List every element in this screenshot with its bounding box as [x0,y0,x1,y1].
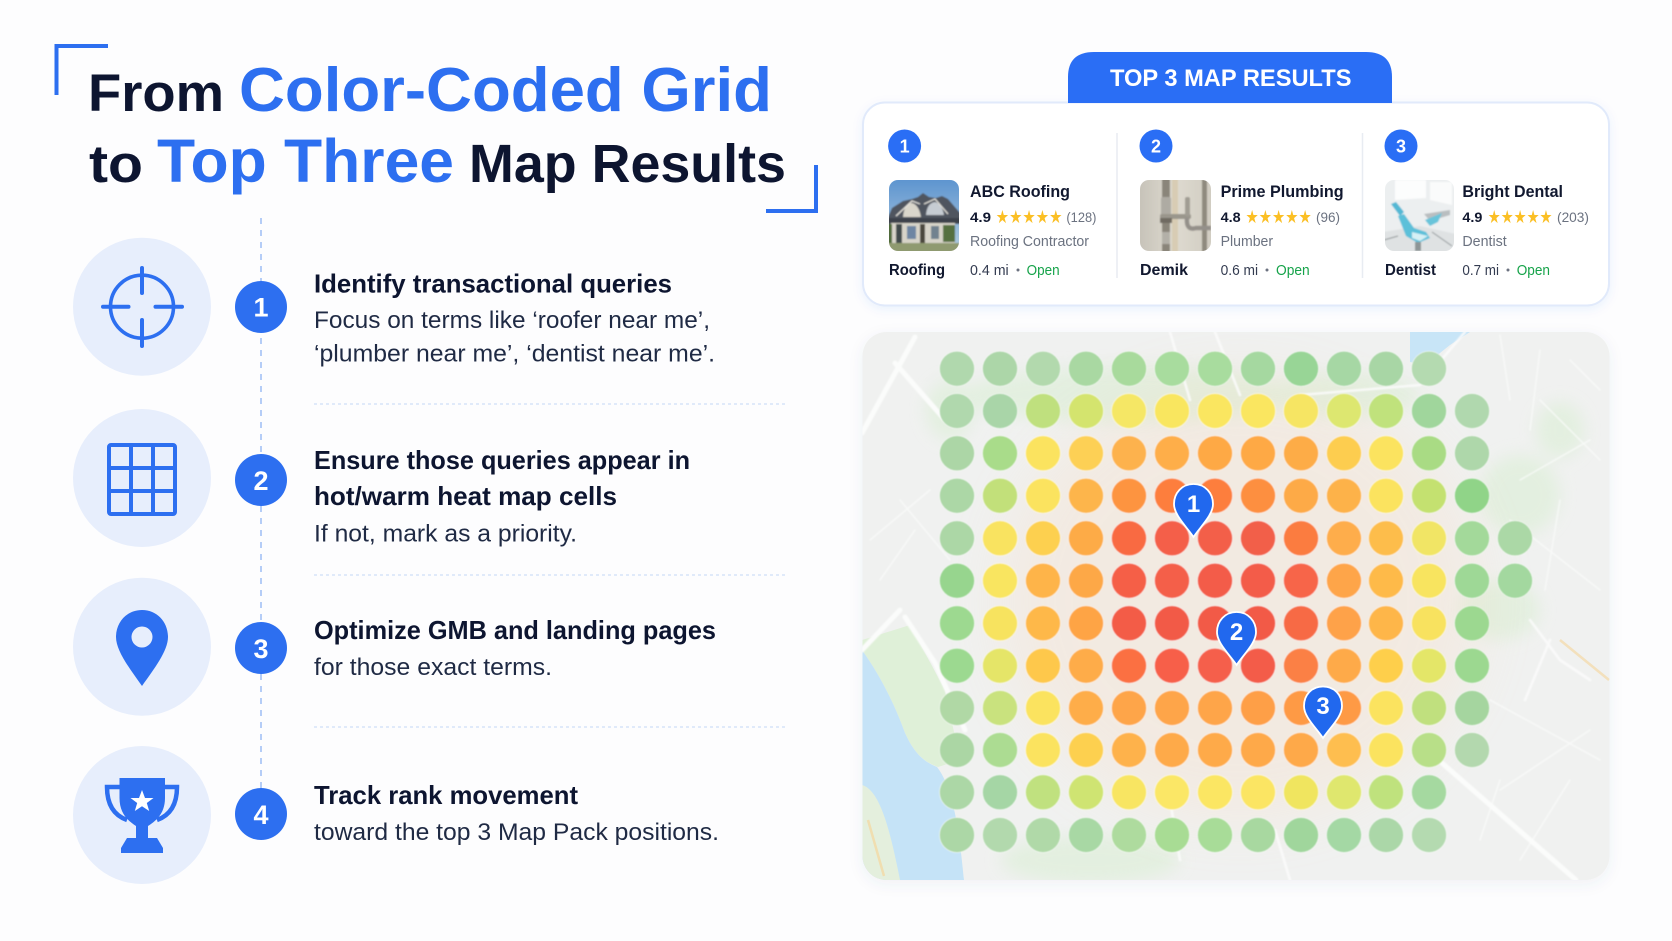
result 2: Prime Plumbing: Prime Plumbing [1221,182,1344,201]
row 12 [940,818,1446,852]
step number 2: 2 [253,466,269,496]
step 2 text: Ensure those queries appear in [314,445,690,475]
row 6 [940,563,1532,598]
map pin 1 [1174,484,1213,537]
results tab [1068,52,1392,103]
thumbnail: house [889,180,959,251]
title line 2: Map Results [469,134,786,194]
step number 3: 3 [253,634,269,664]
row 11 [940,775,1446,810]
step 1 text: Focus on terms like ‘roofer near me’, [314,307,710,334]
rating: ★★★★★ [996,207,1062,227]
result 1: ABC Roofing [886,130,1096,279]
thumbnail: pipes [1140,180,1211,251]
row 9 [940,690,1490,726]
step 4 text [314,780,719,846]
result 2: Prime Plumbing: 2 [1151,136,1161,156]
rating: 4.9 [1462,209,1483,225]
map pin 1: 1 [1187,491,1200,518]
step 4 text: toward the top 3 Map Pack positions. [314,819,719,846]
row 5 [940,521,1532,556]
result 2: Prime Plumbing: Open [1276,263,1310,279]
title bracket: top left [56,46,108,95]
business name: ABC Roofing [970,182,1070,201]
results tab: TOP 3 MAP RESULTS [1110,65,1352,92]
rating [1221,207,1340,227]
step number 1: 1 [253,292,269,322]
result 2: Prime Plumbing: Demik [1140,262,1188,279]
row 4 [940,478,1490,513]
step number 4 [235,788,287,840]
title block [56,46,816,211]
water: northern lake [1410,332,1470,365]
icon: location pin [73,578,211,716]
rating: 4.8 [1221,209,1241,225]
step number 3 [235,622,287,674]
result 3: Bright Dental: Bright Dental [1462,182,1563,201]
rating: ★★★★★ [1488,207,1552,227]
map pin 2: 2 [1230,619,1243,646]
thumbnail: dental chair [1385,180,1454,251]
step 3 text: Optimize GMB and landing pages [314,615,716,645]
timeline dashed connector [260,218,262,795]
result 3: Bright Dental: 0.7 mi [1462,263,1499,279]
title line 1: From [88,64,224,123]
result 1: ABC Roofing: Open [1027,263,1060,279]
row 3 [940,436,1490,471]
step 1 text: ‘plumber near me’, ‘dentist near me’. [314,340,715,368]
result 2: Prime Plumbing: Plumber [1221,234,1273,250]
map base layer [862,332,1609,884]
result 3: Bright Dental: Dentist [1385,262,1437,279]
row 1 [940,351,1446,386]
map pin 3 [1304,686,1342,738]
map pin 3: 3 [1316,693,1330,720]
step 3 text: for those exact terms. [314,654,552,681]
step 1 text [314,268,715,368]
rating: ★★★★★ [1246,207,1312,227]
step number 1 [235,281,287,333]
rating: 4.9 [970,209,991,225]
step 2 text: hot/warm heat map cells [314,481,617,511]
icon: trophy [73,746,211,884]
icon: grid [73,409,211,547]
rating: (96) [1316,209,1340,225]
step 2 text [314,445,690,548]
row 7 [940,606,1490,641]
panel: top 3 map results card [863,52,1609,306]
result 3: Bright Dental [1383,130,1589,279]
result 1: ABC Roofing: 1 [900,136,910,156]
shore vegetation [862,625,960,767]
water: river bay [862,650,964,880]
icon: crosshair [73,238,211,376]
result 2: Prime Plumbing: 0.6 mi [1221,263,1258,279]
title line 2: Top Three [157,127,454,195]
step 2 text: If not, mark as a priority. [314,520,577,548]
step 4 [73,746,719,884]
title line 1: Color-Coded Grid [239,56,772,125]
step 1 [73,238,715,376]
step 4 text: Track rank movement [314,780,578,810]
row 2 [940,394,1490,428]
result 3: Bright Dental: Dentist [1462,234,1507,250]
title line 2 [89,127,786,195]
rating: (203) [1557,209,1589,225]
result 1: ABC Roofing: Roofing [889,262,945,279]
step number 2 [235,454,287,506]
step 3 text [314,615,716,681]
result 1: ABC Roofing: Roofing Contractor [970,234,1089,250]
result 3: Bright Dental: 3 [1396,136,1406,156]
step 3 [73,578,716,716]
step 2 [73,409,690,548]
result 3: Bright Dental: Open [1517,263,1550,279]
rating [970,207,1096,227]
rating: (128) [1066,209,1096,225]
title bracket: bottom right [766,165,816,211]
row 10 [940,732,1490,768]
row 8 [940,648,1490,683]
rating [1462,207,1589,227]
title line 2: to [89,135,143,194]
result 1: ABC Roofing: 0.4 mi [970,263,1009,279]
heat map dot grid [940,351,1532,852]
step 1 text: Identify transactional queries [314,268,672,298]
result 2: Prime Plumbing [1138,130,1344,279]
map pin 2 [1217,612,1256,665]
step number 4: 4 [253,800,269,830]
panel: heat map [862,332,1610,884]
